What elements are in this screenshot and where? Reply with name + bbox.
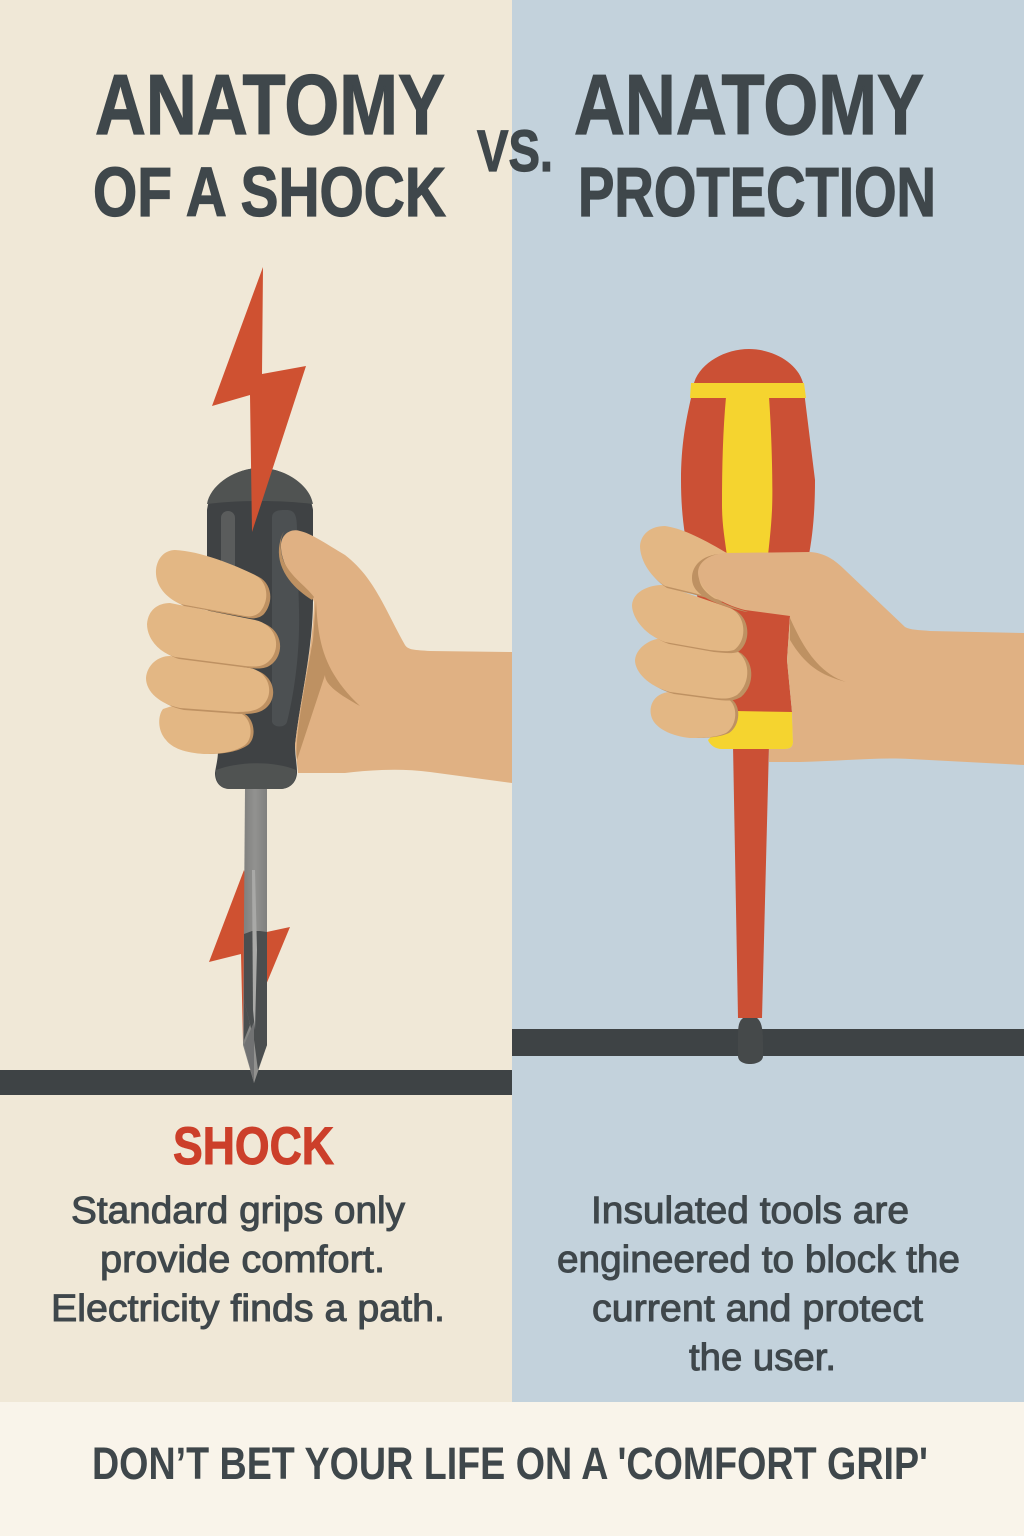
title: anatomy protection: ANATOMY [574, 58, 924, 153]
thumb shadow [692, 553, 748, 612]
illustration: insulated red and yellow handle [681, 349, 815, 749]
footer banner [0, 1402, 1024, 1536]
text block: insulated tools [557, 1190, 960, 1379]
text block: standard grips: Electricity finds a path. [51, 1288, 445, 1330]
thumb and palm [698, 552, 1024, 765]
palm crease [790, 618, 846, 682]
text block: standard grips: provide comfort. [100, 1239, 385, 1281]
text block: insulated tools: current and protect [592, 1288, 923, 1330]
text block: standard grips: Standard grips only [71, 1190, 405, 1232]
icon: upper lightning bolt [212, 267, 306, 532]
illustration: hand gripping insulated handle [632, 526, 1024, 765]
heading: versus: VS. [477, 119, 553, 184]
palm and thumb [281, 530, 512, 783]
illustration: insulated screwdriver shaft [733, 745, 769, 1064]
palm crease [297, 600, 360, 760]
text block: insulated tools: Insulated tools are [591, 1190, 909, 1232]
illustration: standard screwdriver shaft [243, 788, 267, 1083]
panel: protection background [512, 0, 1024, 1402]
title: anatomy of a shock: ANATOMY [95, 58, 445, 153]
wire: right [512, 1029, 1024, 1056]
insulated tip [738, 1018, 763, 1064]
text block: standard grips [51, 1190, 445, 1330]
title: anatomy protection [574, 58, 936, 231]
title: anatomy protection: PROTECTION [578, 153, 936, 231]
illustration: standard black handle [207, 468, 313, 789]
title: anatomy of a shock [93, 58, 446, 231]
panel: shock background [0, 0, 512, 1402]
icon: lower lightning bolt [209, 870, 290, 1042]
title: anatomy of a shock: OF A SHOCK [93, 153, 446, 231]
fingers [162, 706, 254, 754]
heading: shock: SHOCK [173, 1117, 334, 1176]
fingers [654, 692, 738, 738]
illustration: hand gripping standard handle [146, 530, 512, 783]
text block: insulated tools: engineered to block the [557, 1239, 960, 1281]
thumb shadow [279, 531, 314, 600]
wire: left [0, 1070, 512, 1095]
text block: insulated tools: the user. [689, 1337, 836, 1379]
